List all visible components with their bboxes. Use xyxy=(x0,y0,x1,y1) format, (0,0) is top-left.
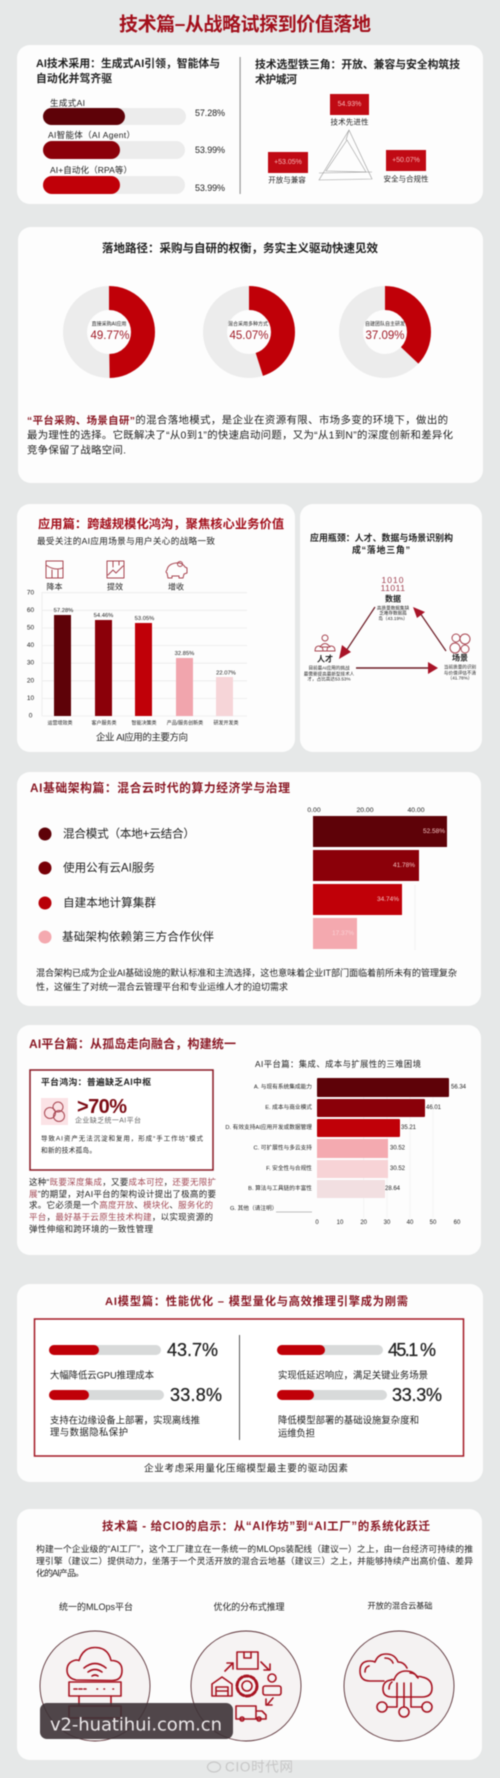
heading: AI platform: AI平台篇：从孤岛走向融合，构建统一 xyxy=(29,1036,236,1051)
watermark: Weibo account: CIO时代网 xyxy=(225,1760,293,1774)
bar chart: main application directions: 企业 AI应用的主要方向 xyxy=(96,732,188,744)
heading: AI technology adoption xyxy=(36,56,220,85)
legend: third party partner: 基础架构依赖第三方合作伙伴 xyxy=(62,930,214,944)
text block: platform expectations xyxy=(29,1177,216,1234)
bar chart: platform challenges: F. 安全性与合规性 xyxy=(266,1164,312,1172)
metric: security and compliance: +50.07% xyxy=(392,157,420,164)
bar chart: platform challenges: 30.52 xyxy=(390,1166,406,1172)
bar chart: infrastructure modes: 0.00 xyxy=(307,807,321,814)
callout: platform gap: 和新的技术孤岛。 xyxy=(41,1146,96,1154)
bar: generative AI xyxy=(43,98,225,125)
metric: edge deployment xyxy=(49,1385,222,1438)
bar chart: platform challenges: 35.21 xyxy=(401,1125,417,1131)
bar chart: main application directions: 70 xyxy=(27,590,34,596)
bar chart: platform challenges: 60 xyxy=(454,1220,461,1226)
icon: cost reduction: 降本 xyxy=(46,582,62,592)
bar chart: platform challenges: 46.01 xyxy=(426,1105,442,1111)
node: data: 1010 xyxy=(382,575,404,585)
icon: overlapping circles xyxy=(41,1098,68,1125)
node: talent: 目前最AI应用的挑战 xyxy=(308,664,350,672)
metric: technology advancement: 技术先进性 xyxy=(330,116,369,126)
legend: public cloud: 使用公有云AI服务 xyxy=(63,860,155,874)
icon: efficiency xyxy=(107,561,124,592)
bar chart: main application directions: 53.05% xyxy=(135,616,154,622)
icon: cloud server xyxy=(67,1648,122,1718)
node: data: 岛（43.19%） xyxy=(378,615,408,622)
metric: infrastructure complexity: 33.3% xyxy=(392,1385,442,1405)
callout: platform gap: 平台鸿沟：普遍缺乏AI中枢 xyxy=(41,1076,151,1087)
heading: CIO implications: 技术篇 - 给CIO的启示：从“AI作坊”到“AI工厂”的系统化跃迁 xyxy=(102,1519,430,1533)
bar: AI automation xyxy=(43,165,225,194)
node: scenario: （41.78%） xyxy=(448,676,472,680)
bar chart: main application directions: 智能决策类 xyxy=(131,720,157,726)
panel: landing path xyxy=(18,227,483,483)
node: scenario: 与价值评估不清 xyxy=(444,670,476,676)
heading: application bottleneck: 应用瓶颈：人才、数据与场景识别构 xyxy=(310,532,453,543)
metric: edge deployment: 理与数据隐私保护 xyxy=(50,1426,128,1438)
arrow: scenario to data xyxy=(413,607,446,651)
bar chart: infrastructure modes: 34.74% xyxy=(377,896,399,903)
subheading: 最受关注的AI应用场景与用户关心的战略一致 xyxy=(37,535,215,546)
bar: AI automation: AI+自动化（RPA等） xyxy=(50,165,132,175)
callout: platform gap xyxy=(30,1070,213,1170)
node: data xyxy=(377,575,409,622)
icon: connected clouds xyxy=(360,1654,432,1717)
bar chart: platform challenges: E. 成本与商业模式 xyxy=(265,1103,312,1111)
node: data: 数据 xyxy=(385,594,401,604)
bar chart: main application directions: 产品/服务创新类 xyxy=(167,720,203,726)
bar chart: main application directions: 40 xyxy=(27,642,34,649)
metric: technology advancement: 54.93% xyxy=(338,101,361,108)
bar chart: main application directions: 20 xyxy=(27,678,34,684)
column: hybrid cloud: 开放的混合云基础 xyxy=(368,1600,432,1610)
bar chart: main application directions: 32.85% xyxy=(175,651,194,657)
text block: hybrid architecture note: 性，这催生了对统一混合云管理平台和专业运维人才的迫切需求 xyxy=(36,981,288,992)
node: scenario: 当前质量的识别 xyxy=(444,664,476,670)
bar: AI agent: 53.99% xyxy=(195,145,225,155)
node: scenario xyxy=(444,634,476,680)
icon: cost reduction xyxy=(46,561,63,592)
metric: security and compliance xyxy=(384,150,429,184)
text block: AI factory: 化的AI产品。 xyxy=(36,1567,84,1578)
bar chart: main application directions: 22.07% xyxy=(216,670,236,676)
node: talent: 才，占比高达53.53% xyxy=(307,676,351,682)
bar chart: main application directions xyxy=(27,590,247,744)
metric: openness and compatibility xyxy=(268,152,308,184)
bar chart: infrastructure modes xyxy=(307,807,447,950)
legend: self-built cluster: 自建本地计算集群 xyxy=(63,896,156,910)
text block: platform expectations: 平台，最好基于云原生技术构建，以实现资源的 xyxy=(29,1212,213,1222)
donut: in-house development: 37.09% xyxy=(365,330,405,342)
donut: in-house development: 自建团队自主研发 xyxy=(365,320,405,328)
bar chart: main application directions: 30 xyxy=(27,660,34,666)
node: data: 11011 xyxy=(381,583,405,593)
panel: application bottleneck triangle xyxy=(300,504,482,752)
bar chart: platform challenges: 30.52 xyxy=(390,1146,406,1152)
watermark: site banner: v2-huatihui.com.cn xyxy=(50,1714,222,1736)
bar chart: platform challenges: 40 xyxy=(407,1220,414,1226)
donut: direct purchase xyxy=(75,298,143,366)
text block: hybrid landing mode: 最为理性的选择。它既解决了“从0到1”的快速启动问题，又为“从1到N”的深度创新和差异化 xyxy=(27,428,453,442)
bar chart: platform challenges: G. 其他（请注明） xyxy=(230,1204,277,1212)
heading: applications: 应用篇：跨越规模化鸿沟，聚焦核心业务价值 xyxy=(38,516,284,531)
callout: platform gap: >70% xyxy=(77,1096,127,1118)
bar chart: platform challenges: 28.64 xyxy=(385,1186,401,1192)
text block: platform expectations: 这种“既要深度集成，又要成本可控，还要无限扩 xyxy=(29,1177,216,1187)
panel: AI platform xyxy=(17,1025,481,1255)
icon: revenue growth xyxy=(166,562,187,592)
text block: AI factory: 理引擎（建议二）提供动力，坐落于一个灵活开放的混合云地基（建议三）之上，并能够持续产出高价值、差异 xyxy=(36,1555,473,1566)
bar chart: platform challenges: B. 算法与工具链的丰富性 xyxy=(248,1184,312,1192)
node: talent: 人才 xyxy=(317,654,333,664)
bar chart: main application directions: 客户服务类 xyxy=(91,720,117,726)
metric: openness and compatibility: +53.05% xyxy=(274,159,302,166)
icon: logistics cycle xyxy=(212,1652,281,1721)
radar triangle xyxy=(319,130,372,180)
legend: hybrid mode: 混合模式（本地+云结合） xyxy=(63,826,195,840)
caption: 企业考虑采用量化压缩模型最主要的驱动因素 xyxy=(144,1462,348,1474)
callout frame: model drivers xyxy=(34,1319,464,1456)
heading: infrastructure: AI基础架构篇：混合云时代的算力经济学与治理 xyxy=(30,781,290,795)
heading: technology selection triangle: 技术选型铁三角：开放、兼容与安全构筑技 xyxy=(255,57,460,71)
donut: hybrid adoption: 45.07% xyxy=(229,330,269,342)
bar: AI agent: AI智能体（AI Agent） xyxy=(48,130,135,140)
bar chart: platform challenges: A. 与现有系统集成能力 xyxy=(254,1082,312,1090)
heading: AI technology adoption: AI技术采用：生成式AI引领，智能体与 xyxy=(36,56,220,70)
icon: revenue growth: 增收 xyxy=(168,582,184,592)
bar chart: infrastructure modes: 20.00 xyxy=(356,807,374,814)
column: distributed inference: 优化的分布式推理 xyxy=(214,1601,284,1612)
bar chart: platform challenges: 56.34 xyxy=(451,1084,467,1090)
heading: application bottleneck: 成“落地三角” xyxy=(352,544,410,555)
heading: AI technology adoption: 自动化并驾齐驱 xyxy=(36,71,112,85)
bar chart: infrastructure modes: 52.58% xyxy=(423,828,445,835)
metric: GPU cost: 43.7% xyxy=(167,1340,218,1360)
metric: low latency: 45.1 % xyxy=(388,1340,436,1360)
panel: CIO implications xyxy=(17,1509,482,1760)
node: talent: 最需要提高最新型技术人 xyxy=(304,670,355,678)
heading: application bottleneck xyxy=(310,532,453,555)
text block: platform expectations: 求。它必须是一个高度开放、模块化、服务化的 xyxy=(29,1200,213,1210)
bar chart: main application directions: 研发开发类 xyxy=(213,720,239,726)
metric: low latency xyxy=(277,1340,436,1380)
text block: platform expectations: 展”的期望，对AI平台的架构设计提出了极高的要 xyxy=(29,1189,216,1199)
panel: technology adoption and selection xyxy=(17,45,483,204)
panel: infrastructure xyxy=(17,772,481,1006)
bar: generative AI: 57.28% xyxy=(195,108,225,118)
node: data: 乏难存数据孤 xyxy=(379,610,407,616)
text block: hybrid landing mode xyxy=(27,414,453,456)
bar: AI automation: 53.99% xyxy=(195,183,225,193)
arrow: data to talent xyxy=(339,607,375,659)
bar: AI agent xyxy=(43,130,225,159)
bar chart: platform challenges: 10 xyxy=(337,1220,344,1226)
bar chart: infrastructure modes: 41.78% xyxy=(393,862,415,869)
metric: infrastructure complexity xyxy=(277,1385,442,1438)
donut: direct purchase: 49.77% xyxy=(90,330,130,342)
heading: AI model: AI模型篇：性能优化 – 模型量化与高效推理引擎成为刚需 xyxy=(105,1294,408,1308)
bar chart: platform challenges: 20 xyxy=(360,1220,368,1226)
metric: GPU cost xyxy=(49,1340,218,1380)
panel: applications chart xyxy=(17,504,295,752)
text block: hybrid architecture note xyxy=(36,967,457,992)
bar chart: main application directions: 运营增效类 xyxy=(47,720,73,726)
bar chart: main application directions: 57.28% xyxy=(54,608,73,614)
arrow: talent to scenario xyxy=(356,662,438,674)
icon: efficiency: 提效 xyxy=(107,582,123,592)
node: data: 高质量数据集缺 xyxy=(377,604,409,612)
bar chart: infrastructure modes: 17.37% xyxy=(332,930,354,937)
metric: edge deployment: 支持在边缘设备上部署，实现离线推 xyxy=(50,1414,200,1426)
text block: hybrid architecture note: 混合架构已成为企业AI基础设施的默认标准和主流选择，这也意味着企业IT部门面临着前所未有的管理复杂 xyxy=(36,967,457,978)
bar chart: platform challenges: 0 xyxy=(315,1220,319,1226)
title: 技术篇–从战略试探到价值落地 xyxy=(119,12,371,36)
callout: platform gap: 导致AI资产无法沉淀和复用，形成“手工作坊”模式 xyxy=(41,1134,204,1142)
heading: technology selection triangle: 术护城河 xyxy=(255,72,297,86)
text block: hybrid landing mode: 竞争保留了战略空间. xyxy=(27,444,126,456)
node: scenario: 场景 xyxy=(452,652,468,662)
bar chart: infrastructure modes: 40.00 xyxy=(407,807,425,814)
donut: hybrid adoption: 混合采用多种方式 xyxy=(228,320,268,328)
callout: platform gap: 企业缺乏统一AI平台 xyxy=(75,1116,141,1124)
metric: low latency: 实现低延迟响应，满足关键业务场景 xyxy=(278,1370,428,1380)
donut: in-house development xyxy=(351,298,419,366)
metric: GPU cost: 大幅降低云GPU推理成本 xyxy=(50,1370,155,1380)
node: talent xyxy=(304,635,355,682)
metric: edge deployment: 33.8% xyxy=(170,1385,222,1405)
bar chart: main application directions: 54.46% xyxy=(94,613,113,619)
metric: infrastructure complexity: 运维负担 xyxy=(278,1428,315,1438)
heading: landing path: 落地路径：采购与自研的权衡，务实主义驱动快速见效 xyxy=(102,241,378,255)
column: MLOps platform xyxy=(40,1601,150,1741)
text block: AI factory xyxy=(36,1543,473,1578)
text block: hybrid landing mode: “平台采购、场景自研”的混合落地模式，是企业在资源有限、市场多变的环境下，做出的 xyxy=(27,414,448,426)
bar chart: platform challenges: C. 可扩展性与多云支持 xyxy=(254,1144,312,1152)
metric: security and compliance: 安全与合规性 xyxy=(384,174,429,184)
bar chart: platform challenges: 50 xyxy=(430,1220,437,1226)
donut: direct purchase: 直接采购AI应用 xyxy=(92,320,126,328)
column: hybrid cloud xyxy=(344,1600,454,1741)
watermark: site banner xyxy=(40,1703,233,1739)
bar: generative AI: 生成式AI xyxy=(50,98,85,108)
metric: infrastructure complexity: 降低模型部署的基础设施复杂度和 xyxy=(278,1414,419,1426)
chart title: trilemma: AI平台篇：集成、成本与扩展性的三难困境 xyxy=(255,1059,421,1069)
metric: openness and compatibility: 开放与兼容 xyxy=(268,174,306,184)
bar chart: main application directions: 10 xyxy=(27,695,34,702)
donut: hybrid adoption xyxy=(215,298,283,366)
column: MLOps platform: 统一的MLOps平台 xyxy=(59,1601,133,1612)
panel: AI model xyxy=(17,1284,483,1482)
metric: technology advancement xyxy=(330,94,369,126)
bar chart: platform challenges: 30 xyxy=(384,1220,391,1226)
bar chart: main application directions: 0 xyxy=(29,712,33,720)
heading: technology selection triangle xyxy=(255,57,460,86)
bar chart: main application directions: 60 xyxy=(27,607,34,614)
bar chart: platform challenges: D. 有效支持AI应用开发或数据管理 xyxy=(225,1123,312,1131)
text block: AI factory: 构建一个企业级的“AI工厂”，这个工厂建立在一条统一的MLOps装配线（建议一）之上，由一台经济可持续的推 xyxy=(36,1543,473,1554)
column: distributed inference xyxy=(191,1601,301,1741)
bar chart: platform challenges xyxy=(225,1078,467,1226)
bar chart: main application directions: 50 xyxy=(27,624,34,632)
text block: platform expectations: 弹性伸缩和跨环境的一致性管理 xyxy=(29,1224,153,1234)
